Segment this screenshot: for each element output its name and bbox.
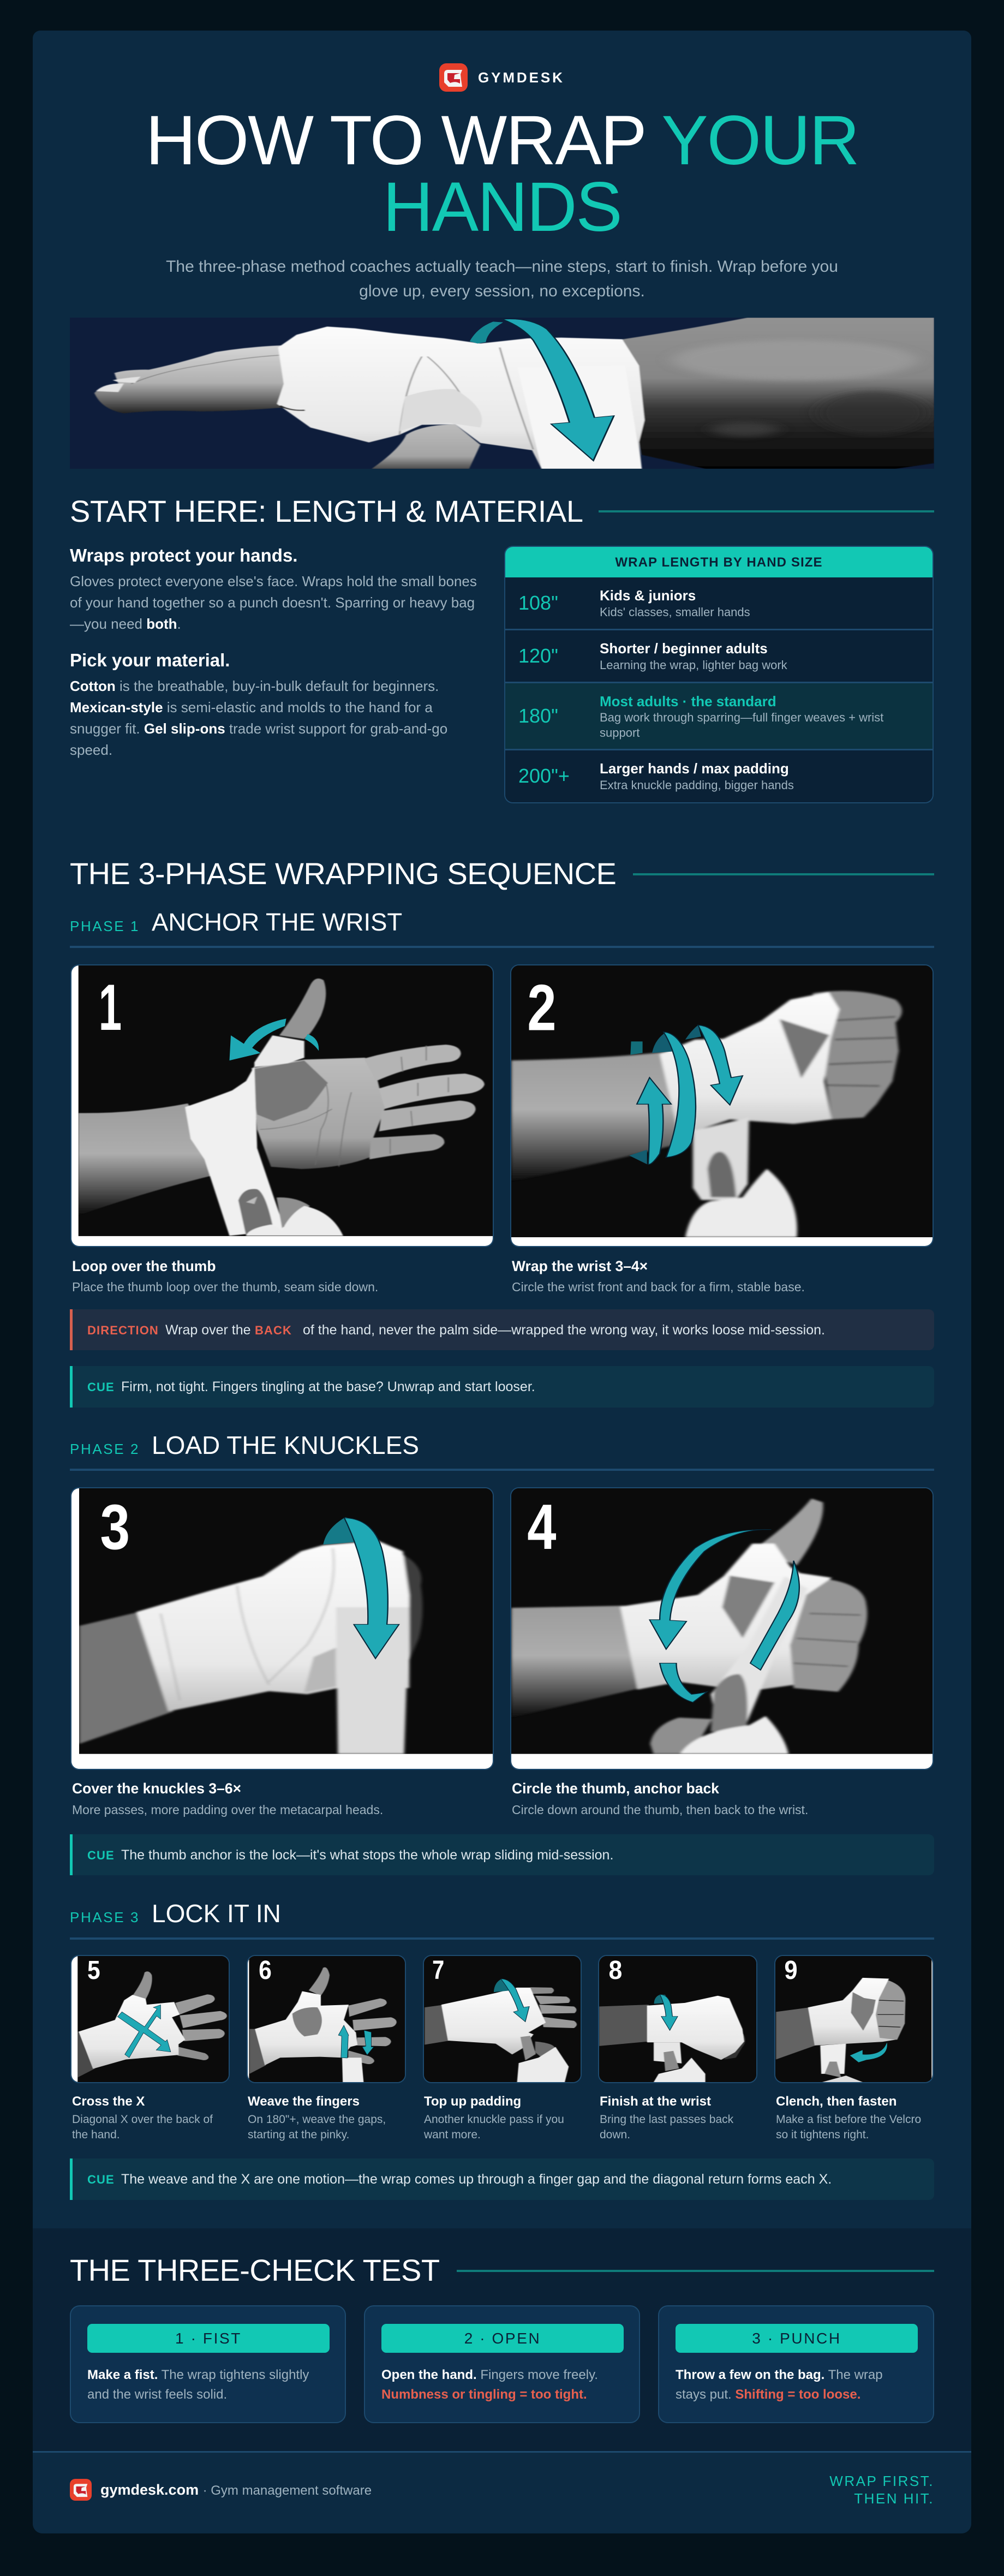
callout: direction: of the hand, never the palm side—wrapped the wrong way, it works loose mid-session. [303, 1322, 825, 1338]
row: 120: 120" [518, 645, 558, 667]
step 2 [510, 964, 934, 1294]
hero photo: wrapped hand with arrow [70, 318, 934, 469]
description: step 5: Diagonal X over the back of the hand. [72, 2113, 213, 2141]
subtitle [166, 258, 838, 300]
footer tagline [829, 2472, 934, 2507]
description: step 8: Bring the last passes back down. [600, 2113, 733, 2141]
pill: open [381, 2324, 624, 2353]
row: 200: Extra knuckle padding, bigger hands [600, 778, 794, 792]
row: 180 highlighted: 180" [518, 705, 558, 727]
text: fist: Make a fist. The wrap tightens slightly [87, 2368, 309, 2382]
callout: cue phase 2: CUE [87, 1848, 115, 1862]
photo: step 4 [510, 1487, 934, 1770]
description: step 3: More passes, more padding over the metacarpal heads. [72, 1803, 383, 1817]
photo: step 5 [70, 1955, 230, 2083]
pill: fist: 1 · FIST [175, 2330, 242, 2347]
subtitle: The three-phase method coaches actually teach—nine steps, start to finish. Wrap before you [166, 258, 838, 276]
phase 2 header [70, 1431, 934, 1471]
row: 200: Larger hands / max padding [600, 760, 789, 777]
subtitle: glove up, every session, no exceptions. [359, 282, 645, 300]
footer tagline: WRAP FIRST. [829, 2473, 934, 2489]
description: step 4: Circle down around the thumb, then back to the wrist. [512, 1803, 808, 1817]
callout: direction [70, 1309, 934, 1350]
text block: pick your material [70, 650, 447, 758]
text block: why wraps: Wraps protect your hands. [70, 545, 297, 565]
phase 2 header: PHASE 2 [70, 1441, 140, 1457]
pill: open: 2 · OPEN [464, 2330, 541, 2347]
row: 108: Kids' classes, smaller hands [600, 605, 750, 619]
heading: three-check test: THE THREE-CHECK TEST [70, 2253, 439, 2287]
caption: step 6: Weave the fingers [248, 2094, 360, 2109]
photo: step 6: 6 [259, 1956, 272, 1985]
row: 108 [505, 577, 933, 630]
phase 3 header: LOCK IT IN [152, 1899, 281, 1928]
text block: pick your material: Cotton is the breathable, buy-in-bulk default for beginners. [70, 678, 439, 694]
text block: pick your material: Pick your material. [70, 650, 230, 670]
callout: cue phase 1: Firm, not tight. Fingers tingling at the base? Unwrap and start looser. [121, 1379, 535, 1394]
text block: pick your material: snugger fit. Gel slip-ons trade wrist support for grab-and-go [70, 720, 447, 737]
footer logo [70, 2479, 92, 2501]
pill: punch: 3 · PUNCH [752, 2330, 841, 2347]
text block: pick your material: Mexican-style is semi-elastic and molds to the hand for a [70, 699, 433, 715]
caption: step 5: Cross the X [72, 2094, 145, 2109]
text: fist [87, 2365, 331, 2405]
photo: step 1 [70, 964, 494, 1247]
callout: direction: BACK [255, 1323, 292, 1337]
callout: cue phase 3 [70, 2158, 934, 2200]
footer url: gymdesk.com · Gym management software [100, 2482, 372, 2498]
text block: pick your material: speed. [70, 742, 112, 758]
step 3 [70, 1487, 494, 1817]
photo: step 1: 1 [99, 971, 122, 1044]
photo: step 8 [598, 1955, 757, 2083]
phase 1 header: PHASE 1 [70, 918, 140, 934]
caption: step 9: Clench, then fasten [776, 2094, 897, 2109]
photo: step 9 [774, 1955, 934, 2083]
row: 108: 108" [518, 592, 558, 614]
description: step 9: Make a fist before the Velcro so it tightens right. [776, 2113, 921, 2141]
photo: step 3 [70, 1487, 494, 1770]
text: open: Numbness or tingling = too tight. [381, 2387, 587, 2402]
photo: step 2 [510, 964, 934, 1247]
caption: step 2: Wrap the wrist 3–4× [512, 1258, 648, 1274]
step 8 [598, 1955, 757, 2143]
heading: start here [70, 494, 934, 528]
callout: cue phase 2 [70, 1834, 934, 1875]
phase 1 header: ANCHOR THE WRIST [152, 908, 402, 936]
row: 200 [505, 750, 933, 803]
row: 200: 200"+ [518, 765, 570, 787]
footer [33, 2451, 971, 2533]
brand name: GYMDESK [478, 69, 565, 86]
phase 3 header: PHASE 3 [70, 1909, 140, 1925]
text block: why wraps [70, 545, 477, 632]
description: step 2: Circle the wrist front and back for a firm, stable base. [512, 1280, 805, 1294]
callout: cue phase 2: The thumb anchor is the lock—it's what stops the whole wrap sliding mid-session. [121, 1847, 613, 1863]
row: 180 highlighted: Most adults · the standard [600, 693, 776, 709]
heading: three phase sequence [70, 856, 934, 891]
photo: step 7 [423, 1955, 582, 2083]
heading: three-check test [70, 2251, 934, 2289]
description: step 7: Another knuckle pass if you want more. [424, 2113, 564, 2141]
photo: step 4: 4 [527, 1491, 556, 1563]
text: open: Open the hand. Fingers move freely. [381, 2368, 598, 2382]
row: 120: Shorter / beginner adults [600, 640, 768, 657]
text: punch [676, 2365, 919, 2405]
caption: step 3: Cover the knuckles 3–6× [72, 1780, 241, 1797]
photo: step 2: 2 [527, 971, 556, 1044]
caption: step 1: Loop over the thumb [72, 1258, 216, 1274]
callout: cue phase 1 [70, 1366, 934, 1408]
footer tagline: THEN HIT. [854, 2490, 934, 2507]
heading: three phase sequence: THE 3-PHASE WRAPPING SEQUENCE [70, 856, 616, 891]
table header: WRAP LENGTH BY HAND SIZE [615, 555, 823, 570]
callout: cue phase 1: CUE [87, 1380, 115, 1394]
title: HANDS [383, 168, 621, 246]
photo: step 6 [247, 1955, 406, 2083]
callout: cue phase 3: The weave and the X are one motion—the wrap comes up through a finger gap and the diagonal return forms each X. [121, 2172, 832, 2187]
caption: step 7: Top up padding [424, 2094, 521, 2109]
phase 3 header [70, 1899, 934, 1940]
callout: direction: DIRECTION [87, 1323, 159, 1337]
table header [505, 547, 933, 577]
caption: step 8: Finish at the wrist [600, 2094, 711, 2109]
title: HOW TO WRAP YOUR [146, 102, 858, 180]
photo: step 3: 3 [100, 1491, 130, 1563]
row: 120 [505, 630, 933, 683]
header logo [439, 63, 468, 92]
description: step 1: Place the thumb loop over the thumb, seam side down. [72, 1280, 378, 1294]
caption: step 4: Circle the thumb, anchor back [512, 1780, 719, 1797]
row: 180 highlighted: Bag work through sparring—full finger weaves + wrist [600, 711, 883, 724]
step 7 [423, 1955, 582, 2141]
callout: direction: Wrap over the [165, 1322, 251, 1338]
check card: open [364, 2305, 640, 2423]
step 6 [247, 1955, 406, 2141]
phase 2 header: LOAD THE KNUCKLES [152, 1431, 419, 1459]
check card: fist [70, 2305, 346, 2423]
text: punch: Throw a few on the bag. The wrap [676, 2368, 883, 2382]
text: open [381, 2365, 625, 2405]
text block: why wraps: —you need both. [70, 616, 181, 632]
text block: why wraps: of your hand together so a punch doesn't. Sparring or heavy bag [70, 594, 475, 611]
step 1 [70, 964, 494, 1294]
step 5 [70, 1955, 230, 2141]
pill: fist [87, 2324, 330, 2353]
panel: three-check test background [33, 2228, 971, 2451]
text block: why wraps: Gloves protect everyone else's face. Wraps hold the small bones [70, 573, 477, 589]
panel: wrap length table [504, 546, 934, 803]
check card: punch [658, 2305, 934, 2423]
phase 1 header [70, 908, 934, 948]
photo: step 7: 7 [432, 1956, 444, 1985]
row: 180 highlighted [505, 683, 933, 750]
text: fist: and the wrist feels solid. [87, 2387, 227, 2402]
step 4 [510, 1487, 934, 1817]
photo: step 8: 8 [608, 1956, 622, 1984]
heading: start here: START HERE: LENGTH & MATERIAL [70, 494, 583, 528]
text: punch: stays put. Shifting = too loose. [676, 2387, 860, 2402]
photo: step 5: 5 [87, 1956, 100, 1985]
step 9 [774, 1955, 934, 2143]
description: step 6: On 180"+, weave the gaps, starting at the pinky. [248, 2113, 386, 2141]
row: 120: Learning the wrap, lighter bag work [600, 658, 787, 672]
title [146, 102, 858, 246]
row: 180 highlighted: support [600, 726, 640, 740]
row: 108: Kids & juniors [600, 587, 696, 604]
callout: cue phase 3: CUE [87, 2173, 115, 2186]
pill: punch [676, 2324, 918, 2353]
